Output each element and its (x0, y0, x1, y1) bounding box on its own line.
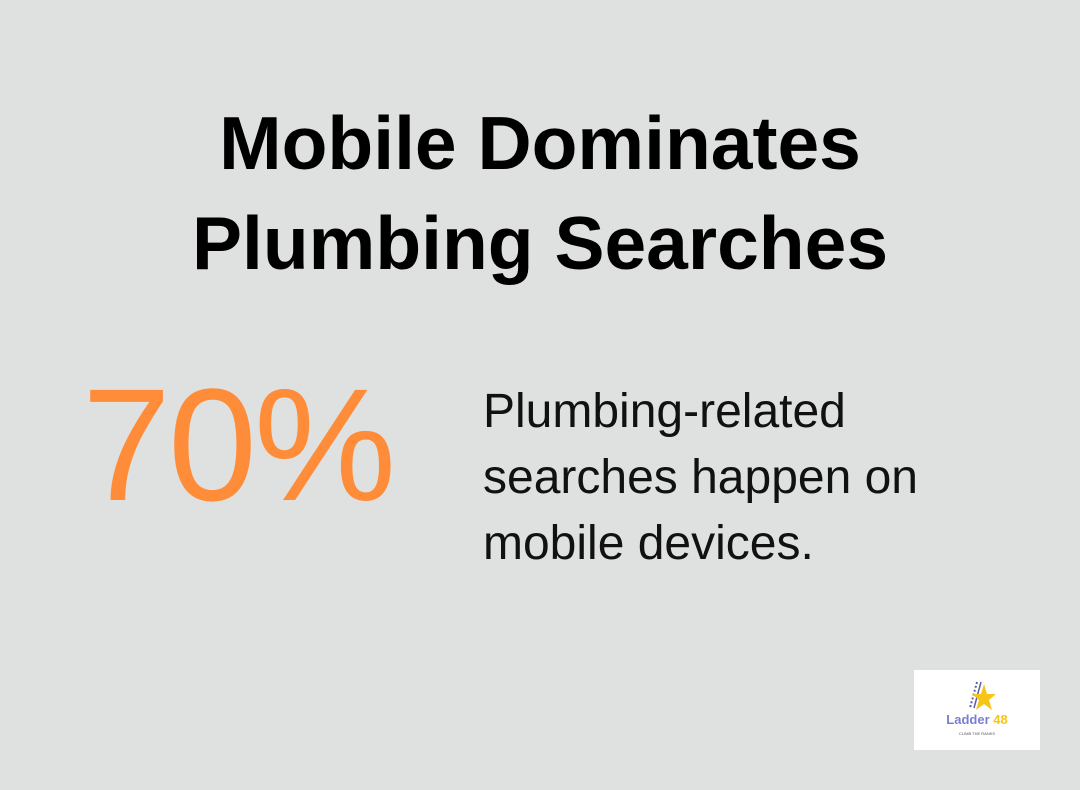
title: Mobile Dominates (219, 101, 861, 185)
title: Plumbing Searches (192, 201, 888, 285)
logo: CLIMB THE RANKS (959, 731, 995, 736)
description: Plumbing-related (483, 385, 846, 438)
icon: ladder star (970, 682, 996, 710)
description: mobile devices. (483, 517, 814, 570)
description (483, 385, 918, 570)
title (192, 101, 888, 285)
description: searches happen on (483, 451, 918, 504)
logo text: Ladder 48 (946, 712, 1008, 727)
big stat: 70% (82, 355, 393, 534)
logo (914, 670, 1040, 750)
